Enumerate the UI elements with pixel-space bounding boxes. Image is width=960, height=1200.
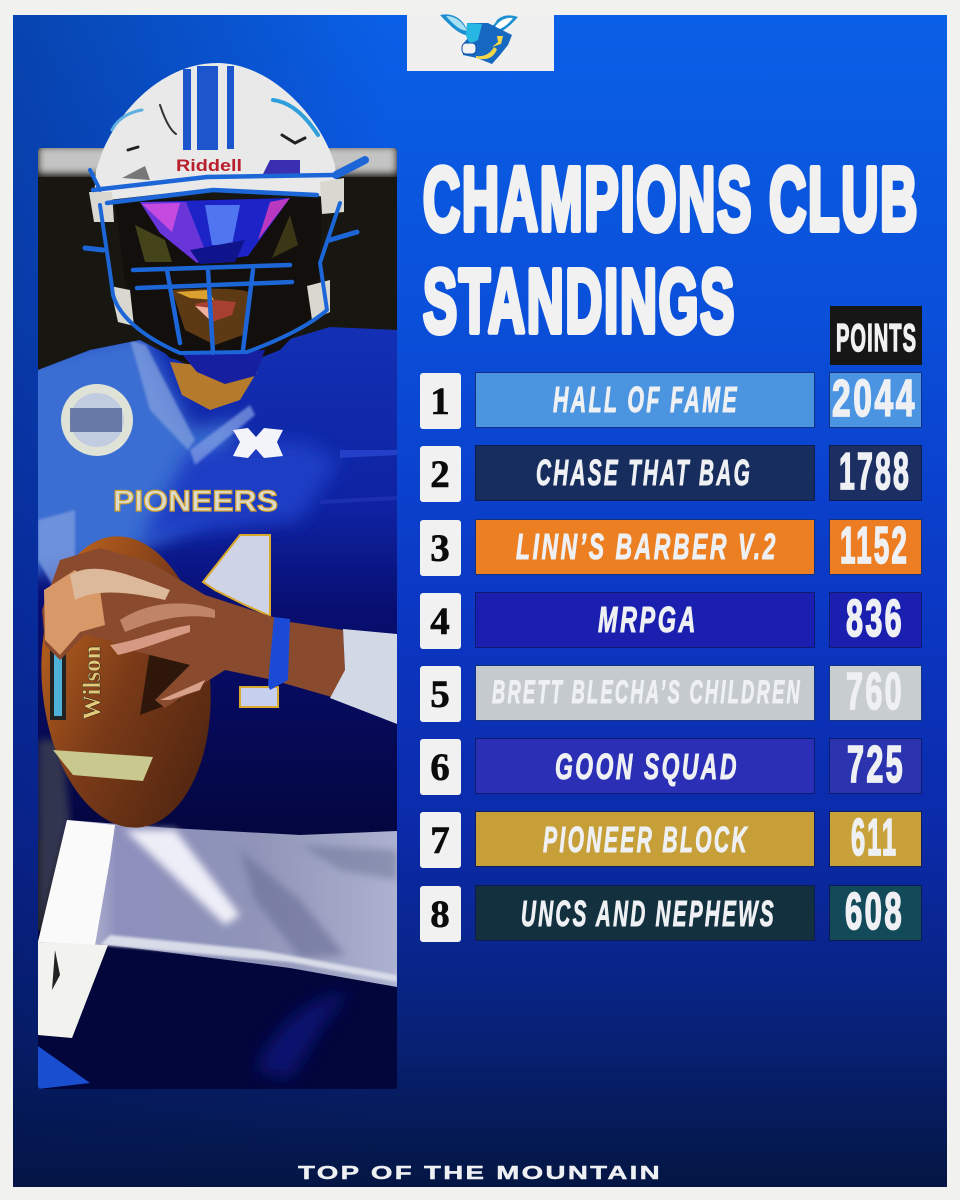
standings row 6: 6 xyxy=(430,746,450,789)
helmet decals xyxy=(112,100,318,180)
football: Wilson xyxy=(79,645,106,720)
facemask xyxy=(85,160,365,353)
helmet shell xyxy=(94,63,338,200)
standings row 7: 611 xyxy=(851,809,898,867)
hand and wrist xyxy=(42,548,345,708)
standings row 3: LINN’S BARBER V.2 xyxy=(516,526,778,567)
standings row 3 xyxy=(420,517,922,576)
standings row 1: HALL OF FAME xyxy=(553,379,739,420)
blue glove corner xyxy=(38,1046,90,1089)
wristband xyxy=(268,617,290,690)
points column header xyxy=(830,306,922,365)
standings row 5: 5 xyxy=(430,673,450,716)
standings row 2: CHASE THAT BAG xyxy=(536,452,752,493)
shoulder patch xyxy=(61,384,133,456)
helmet xyxy=(85,63,365,384)
standings row 1 xyxy=(420,370,922,429)
stadium blur behind waist xyxy=(38,740,70,945)
standings row 8: 608 xyxy=(845,883,904,941)
standings row 6: 725 xyxy=(847,736,905,794)
sleeve xyxy=(330,629,397,724)
standings row 6 xyxy=(420,736,922,795)
standings row 4: MRPGA xyxy=(598,599,698,640)
visor xyxy=(135,198,298,264)
chest logo xyxy=(233,428,283,458)
logo tab xyxy=(407,14,554,71)
standings row 2: 2 xyxy=(430,453,450,496)
jersey xyxy=(38,327,397,840)
jersey wordmark: PIONEERS xyxy=(113,485,278,518)
standings row 5: 760 xyxy=(846,663,904,721)
helmet interior xyxy=(115,198,322,372)
standings row 4 xyxy=(420,590,922,649)
helmet stripes xyxy=(183,66,234,150)
pants xyxy=(38,930,397,1089)
standings row 8 xyxy=(420,883,922,942)
helmet brand: Riddell xyxy=(176,156,242,175)
standings row 2 xyxy=(420,443,922,502)
footer tagline: TOP OF THE MOUNTAIN xyxy=(298,1163,662,1183)
neck xyxy=(170,362,257,410)
standings row 7: 7 xyxy=(430,819,450,862)
standings row 3: 3 xyxy=(430,527,450,570)
helmet side pads xyxy=(89,178,344,326)
standings row 4: 4 xyxy=(430,600,450,643)
icon: bull head logo xyxy=(440,14,518,64)
chin guard xyxy=(180,350,265,384)
standings row 1: 1 xyxy=(430,380,450,423)
standings row 8: UNCS AND NEPHEWS xyxy=(521,893,776,934)
title xyxy=(423,150,919,352)
white shirt xyxy=(38,820,397,1038)
standings row 5 xyxy=(420,663,922,722)
face xyxy=(172,289,248,345)
jersey highlights xyxy=(38,340,397,586)
photo backdrop xyxy=(38,146,397,1089)
title: STANDINGS xyxy=(423,252,736,352)
jersey number xyxy=(203,535,278,707)
standings row 6: GOON SQUAD xyxy=(555,746,739,787)
standings row 1: 2044 xyxy=(832,370,917,428)
standings row 7 xyxy=(420,809,922,868)
panel: player photo xyxy=(20,63,397,1089)
football xyxy=(41,536,211,828)
standings row 8: 8 xyxy=(430,893,450,936)
standings row 4: 836 xyxy=(846,590,904,648)
standings row 7: PIONEER BLOCK xyxy=(543,819,749,860)
